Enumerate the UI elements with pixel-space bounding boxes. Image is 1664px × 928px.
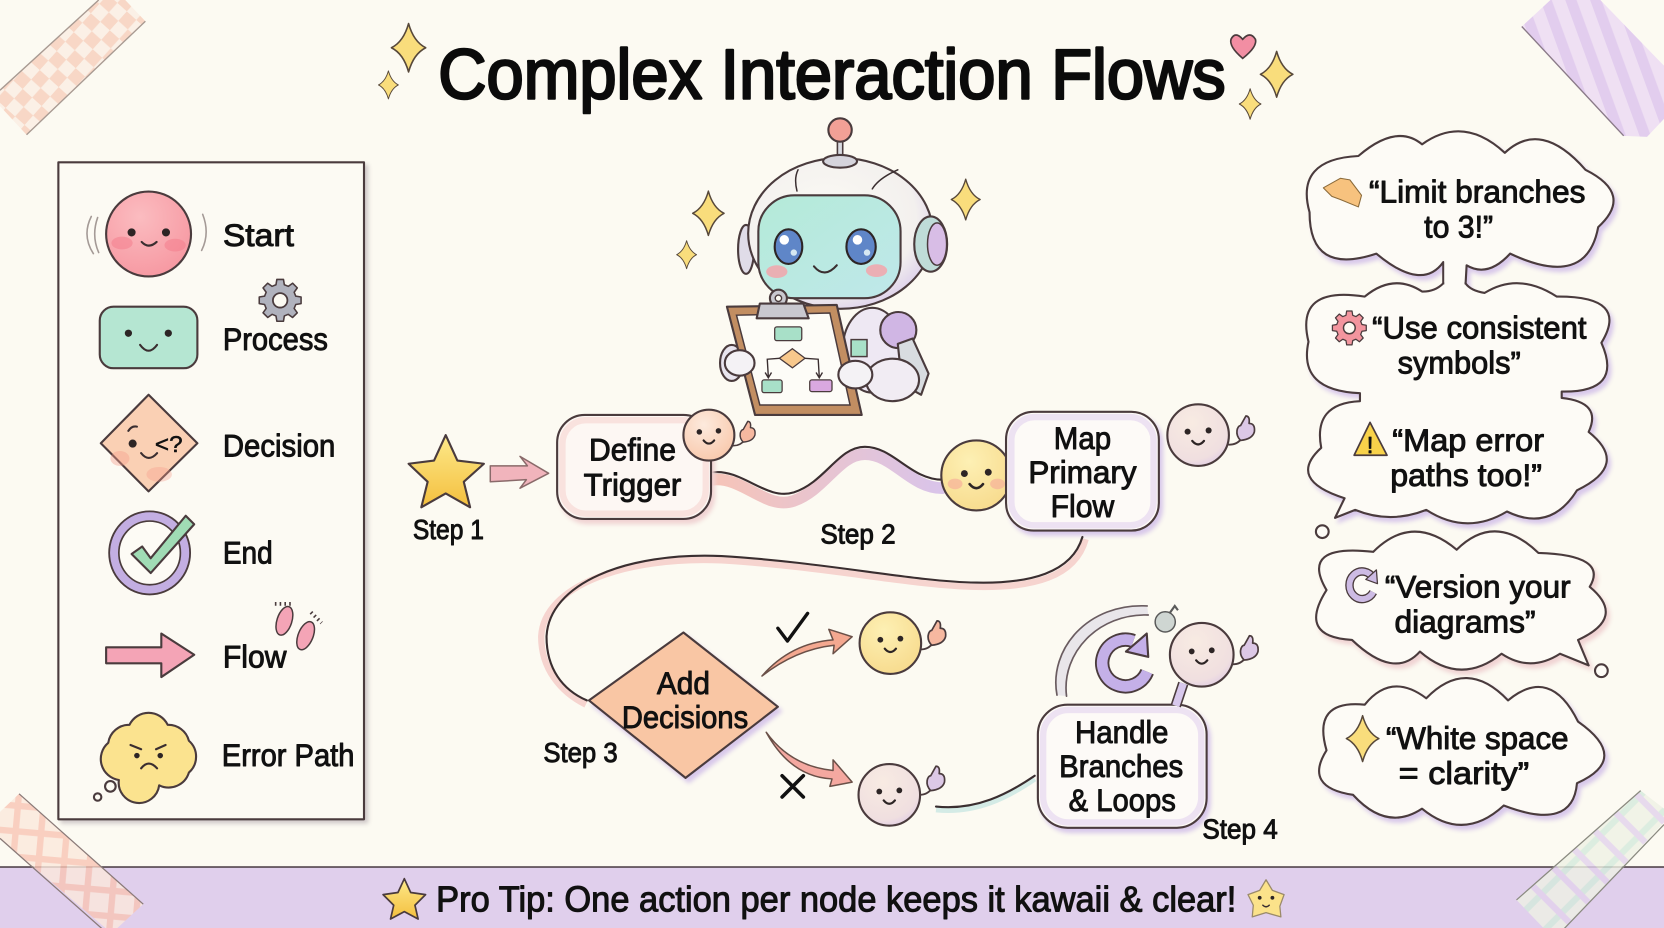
step 3 label: Step 3 (543, 737, 618, 768)
gear icon (1332, 311, 1366, 345)
robot hands (725, 350, 872, 388)
character: no face (859, 764, 945, 826)
helmet (748, 155, 933, 309)
character: lilac face (1167, 404, 1255, 466)
node: map primary flow: Flow (1051, 488, 1115, 524)
thought bubble dot (1316, 525, 1329, 538)
loop icon and arcs (1056, 606, 1183, 706)
tip clouds: consistent symbols and map error paths: symbols” (1398, 345, 1521, 381)
tip clouds: consistent symbols and map error paths (1306, 260, 1609, 523)
icon: banner star (383, 879, 426, 919)
legend item: decision: Decision (223, 427, 335, 463)
node: add decisions: Decisions (622, 699, 748, 735)
tip clouds: consistent symbols and map error paths: paths too!” (1390, 457, 1542, 493)
arrow to lilac face (766, 732, 852, 786)
sparkles around robot (677, 179, 980, 269)
banner: pro tip (0, 867, 1664, 928)
branch: yes (762, 612, 946, 676)
tip cloud: white space: “White space (1386, 720, 1568, 756)
icon: star (409, 435, 484, 507)
node: define trigger (557, 415, 711, 519)
neck patch (1444, 260, 1464, 292)
washi tape: bottom left (0, 794, 143, 928)
panel: legend (58, 162, 364, 819)
robot mascot with clipboard (677, 118, 980, 415)
clipboard (727, 290, 862, 415)
washi tape: bottom right (1516, 791, 1664, 928)
node: define trigger: Define (589, 432, 676, 468)
flow step 1: star start (409, 435, 549, 545)
legend item: error path: Error Path (222, 737, 354, 773)
character: loop face (1170, 623, 1258, 687)
legend item: end: End (223, 535, 273, 571)
arrow to yellow face (762, 629, 852, 676)
wavy connector: step 1 to step 2 (713, 447, 942, 503)
warning icon (1354, 422, 1387, 458)
legend item: end (109, 512, 273, 594)
node: define trigger: Trigger (584, 467, 682, 503)
washi tape: top right (1522, 0, 1664, 137)
node: handle branches and loops (1038, 705, 1207, 828)
legend item: decision: <? (155, 431, 183, 457)
node: map primary flow (1006, 412, 1159, 531)
legend item: flow: Flow (223, 639, 287, 675)
curved connector: step 2 to step 3 (541, 537, 1086, 705)
thought bubble dot (1595, 664, 1608, 677)
antenna (828, 118, 852, 159)
right ear (914, 216, 947, 272)
legend item: error path (94, 713, 354, 803)
left ear (738, 225, 754, 274)
tip cloud: limit branches: to 3!” (1424, 209, 1493, 245)
character: peach face (683, 410, 755, 461)
tip cloud: white space (1319, 678, 1604, 825)
face screen (758, 195, 901, 298)
washi tape: top left (0, 0, 145, 135)
tip cloud: version diagrams: “Version your (1385, 568, 1571, 604)
title decorations (378, 24, 1293, 119)
node: handle branches and loops: Branches (1059, 748, 1183, 784)
icon: check mark (778, 613, 808, 641)
node: add decisions (589, 632, 778, 778)
map error text: “Map error (1392, 422, 1544, 458)
tip cloud: limit branches: “Limit branches (1369, 174, 1585, 210)
node: map primary flow: Map (1054, 420, 1111, 456)
connector: no branch to handle branches (936, 776, 1035, 810)
tip cloud: version diagrams: diagrams” (1394, 603, 1536, 639)
character: yes face (860, 612, 946, 674)
legend item: flow (106, 604, 322, 677)
node: add decisions: Add (657, 665, 710, 701)
legend item: start: Start (223, 217, 294, 253)
arrow to define trigger (490, 456, 549, 488)
legend item: decision (101, 395, 335, 491)
tip cloud: version diagrams (1316, 531, 1606, 670)
branch: no (766, 732, 945, 826)
warning icon: ! (1367, 432, 1373, 458)
title: Complex Interaction Flows (438, 36, 1226, 114)
step 2 label: Step 2 (820, 518, 896, 549)
legend item: start (87, 192, 294, 276)
icon: smiling star (1248, 880, 1284, 917)
tip cloud: white space: = clarity” (1399, 755, 1529, 791)
node: handle branches and loops: & Loops (1069, 782, 1176, 818)
consistent symbols text: “Use consistent (1372, 310, 1587, 346)
step 4 label: Step 4 (1202, 813, 1278, 844)
legend item: process (100, 279, 328, 368)
node: map primary flow: Primary (1028, 454, 1137, 490)
icon: x mark (782, 776, 803, 797)
tip cloud: limit branches (1307, 131, 1614, 284)
banner band (0, 867, 1664, 928)
node: handle branches and loops: Handle (1075, 714, 1168, 750)
legend frame (58, 162, 364, 819)
character: yellow face (941, 440, 1011, 510)
step 1 label: Step 1 (413, 514, 484, 545)
robot body and arm (720, 308, 929, 401)
pro tip text: Pro Tip: One action per node keeps it kawaii & clear! (436, 879, 1236, 920)
legend item: process: Process (223, 321, 328, 357)
